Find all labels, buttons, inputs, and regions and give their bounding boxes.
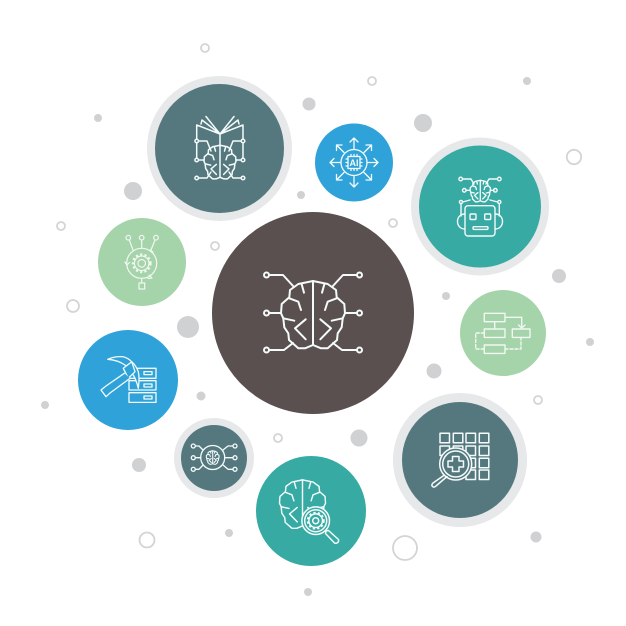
- panel: gear cycle: [98, 218, 186, 306]
- panel: flowchart: [460, 290, 546, 376]
- icon: open book with brain: [195, 116, 245, 180]
- icon: brain with magnifier gear: [279, 480, 339, 543]
- icon: circuit brain: [264, 272, 362, 352]
- icon: AI chip with arrows: [330, 138, 378, 187]
- icon: gear in cycle: [125, 235, 158, 289]
- icon: magnified data grid: [432, 433, 489, 487]
- panel: robot brain: [411, 138, 549, 276]
- panel: brain network: [174, 418, 254, 498]
- icon: robot with brain: [458, 177, 502, 236]
- icon: pickaxe data mining: [101, 357, 156, 402]
- panel: grid search: [393, 393, 527, 527]
- panel: pickaxe and servers: [78, 330, 178, 430]
- decorative ring dots: [57, 44, 581, 560]
- panel: brain search: [256, 456, 366, 566]
- icon: flowchart: [476, 313, 530, 353]
- decorative gray dots: [41, 77, 594, 596]
- panel: AI chip: [315, 124, 393, 202]
- panel: central brain: [212, 212, 414, 414]
- icon: brain network: [191, 444, 237, 471]
- panel: book brain: [147, 76, 292, 221]
- icon text: AI: AI: [350, 158, 358, 168]
